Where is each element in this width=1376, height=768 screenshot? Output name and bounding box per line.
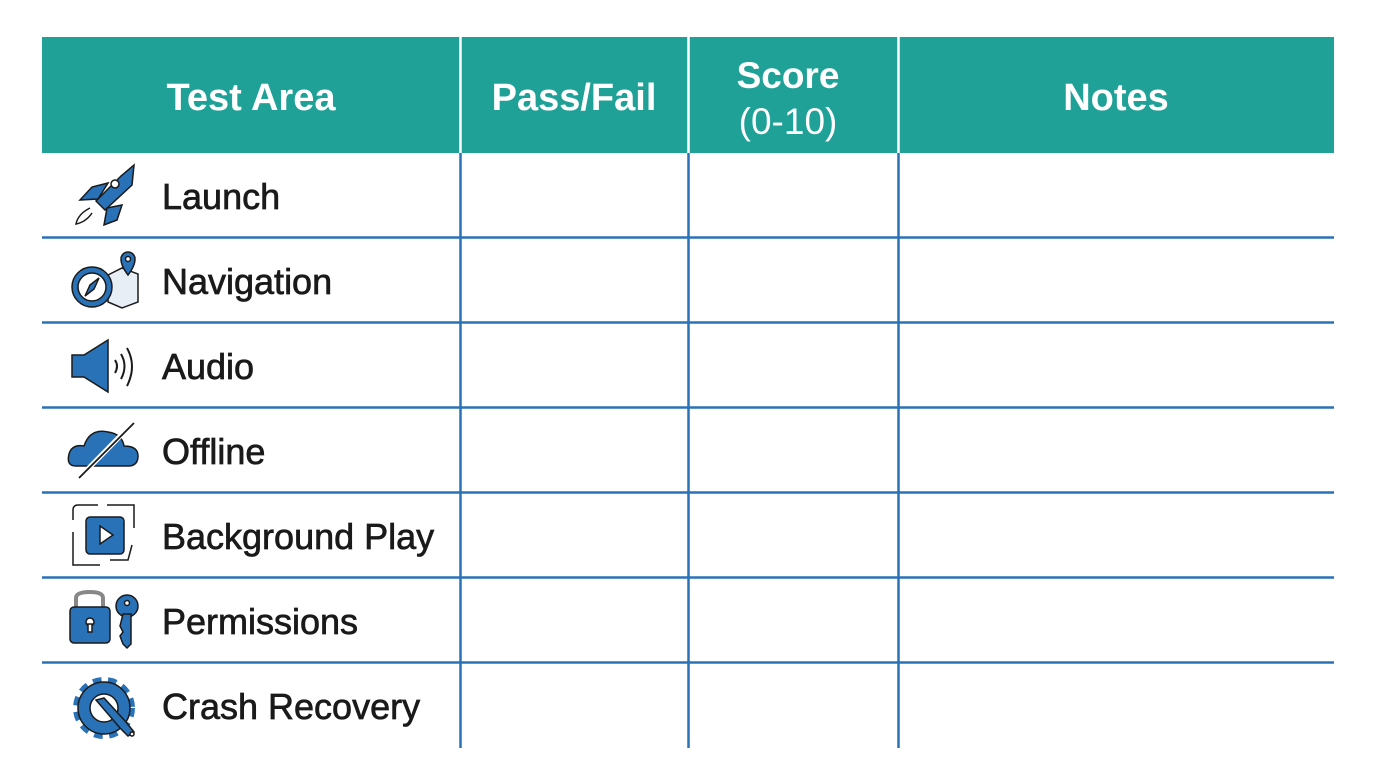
row labels: Audio bbox=[162, 346, 254, 387]
icon: offline cloud bbox=[68, 423, 138, 478]
row labels: Crash Recovery bbox=[162, 686, 420, 727]
icon: gear with wrench bbox=[78, 682, 134, 736]
row labels: Offline bbox=[162, 431, 265, 472]
header row: Pass/Fail bbox=[492, 77, 656, 119]
icon: lock and key bbox=[70, 592, 138, 648]
icon: navigation bbox=[72, 252, 138, 308]
row labels bbox=[162, 176, 434, 727]
icon: background play bbox=[73, 505, 134, 565]
grid lines bbox=[42, 153, 1334, 748]
row labels: Navigation bbox=[162, 261, 332, 302]
header row: Test Area bbox=[167, 77, 336, 119]
header row: (0-10) bbox=[739, 101, 837, 142]
header row bbox=[42, 37, 1334, 153]
row labels: Background Play bbox=[162, 516, 434, 557]
icon: rocket bbox=[76, 165, 134, 225]
header row: Notes bbox=[1063, 77, 1169, 119]
row labels: Launch bbox=[162, 176, 280, 217]
header row: Score bbox=[737, 55, 839, 96]
row labels: Permissions bbox=[162, 601, 358, 642]
icon: speaker bbox=[72, 340, 132, 392]
